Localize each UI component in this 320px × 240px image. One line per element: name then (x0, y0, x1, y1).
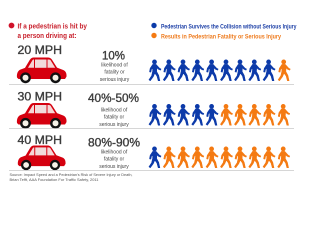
row: 20 MPH (9, 45, 294, 84)
row: 30 MPH: 30 MPH (18, 92, 62, 104)
heading: if a pedestrian is hit: a person driving at: (18, 33, 76, 40)
row: 30 MPH: 40%-50% (88, 93, 139, 105)
row: 20 MPH: 10% (102, 50, 125, 62)
infographic (8, 22, 297, 182)
legend (151, 23, 297, 40)
source note (10, 173, 132, 182)
row: 40 MPH: likelihood of (101, 150, 128, 156)
row: 30 MPH (9, 92, 294, 129)
row: 20 MPH: 20 MPH (18, 45, 62, 57)
source note: Source: Impact Speed and a Pedestrian's Risk of Severe Injury or Death, (10, 173, 132, 177)
row: 30 MPH: likelihood of (101, 108, 128, 114)
row: 20 MPH: likelihood of (101, 62, 128, 68)
heading: if a pedestrian is hit (9, 23, 87, 40)
row: 40 MPH: serious injury (99, 164, 129, 170)
legend: Results in Pedestrian Fatality or Serious Injury (161, 33, 281, 40)
row: 20 MPH: serious injury (100, 77, 130, 83)
row: 40 MPH: 40 MPH (18, 135, 62, 147)
row: 40 MPH (9, 135, 294, 170)
heading: if a pedestrian is hit: If a pedestrian is hit by (18, 23, 87, 30)
row: 30 MPH: fatality or (104, 114, 124, 120)
row: 20 MPH: fatality or (104, 70, 125, 76)
row: 30 MPH: serious injury (99, 122, 129, 128)
source note: Brian Tefft, AAA Foundation For Traffic Safety, 2011 (10, 178, 98, 182)
row: 40 MPH: 80%-90% (88, 138, 140, 150)
row: 40 MPH: fatality or (104, 156, 124, 162)
